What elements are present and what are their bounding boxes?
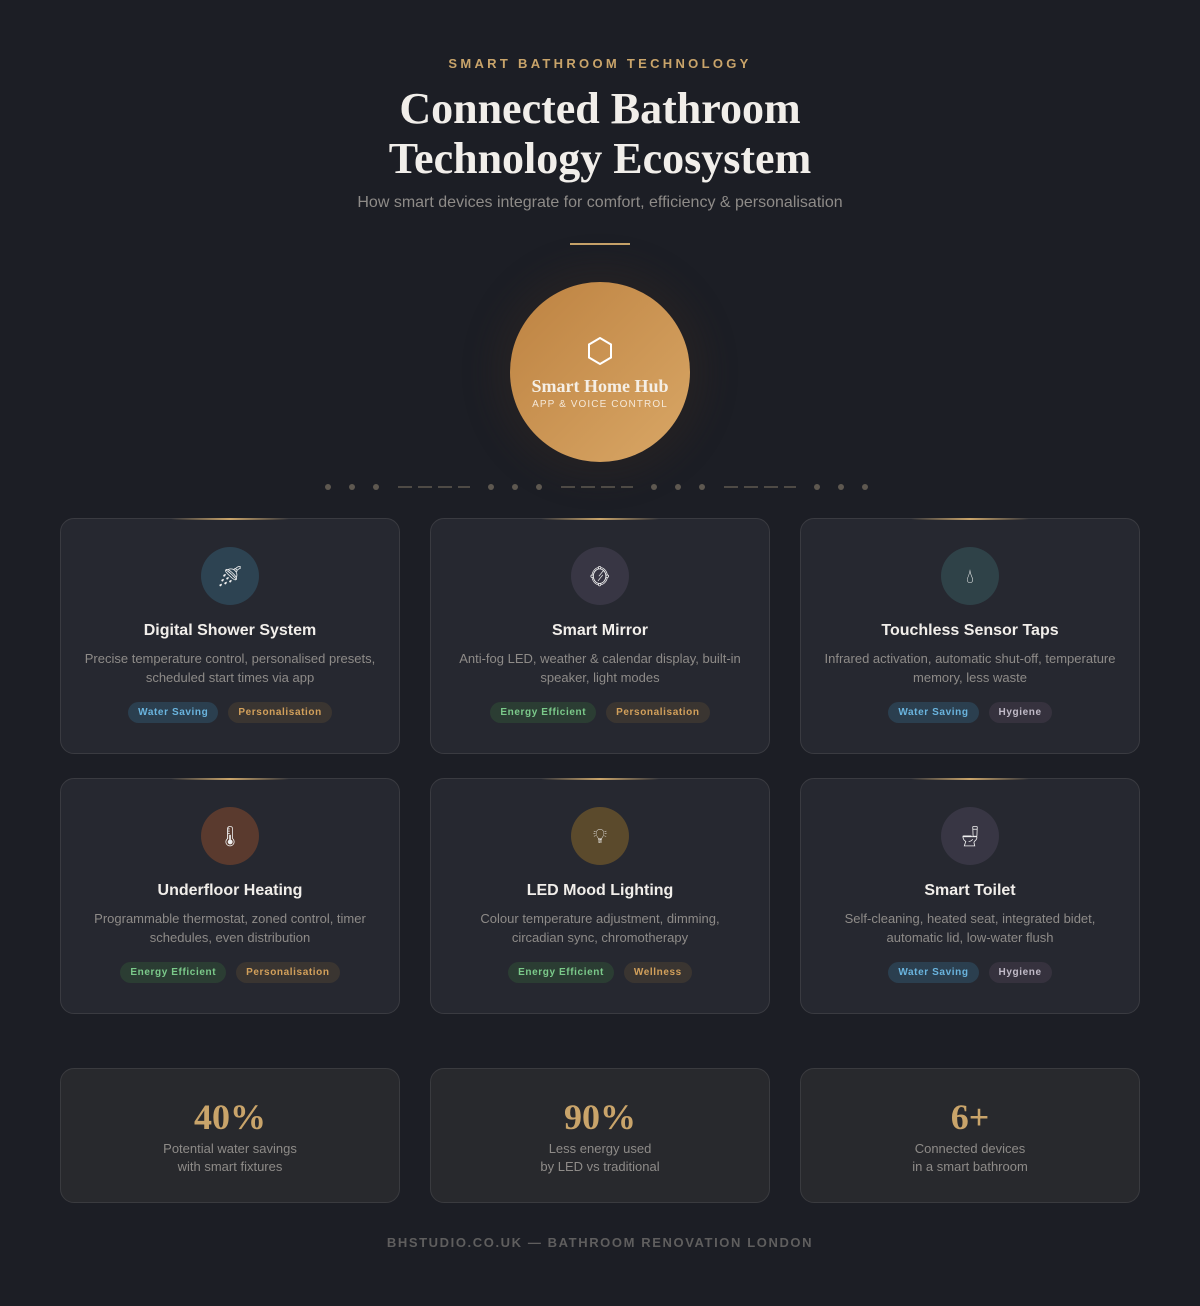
card: mirror: [430, 518, 770, 754]
title: [389, 84, 811, 183]
card: lighting: LED Mood Lighting: [527, 882, 673, 899]
card: shower: 🚿︎: [217, 564, 243, 588]
card: lighting: Wellness: [634, 967, 682, 978]
card: heating: Energy Efficient: [130, 967, 216, 978]
footer: BHSTUDIO.CO.UK — BATHROOM RENOVATION LONDON: [387, 1235, 813, 1250]
card: taps: 💧︎: [966, 564, 974, 588]
card: toilet: [800, 778, 1140, 1014]
card: shower: Water Saving: [138, 707, 208, 718]
card: mirror: Anti-fog LED, weather & calendar display, built-in speaker, light modes: [459, 651, 741, 685]
title: Connected Bathroom: [399, 84, 801, 133]
hub: [510, 282, 690, 462]
stat: water: Potential water savings: [163, 1141, 297, 1156]
stat: energy: 90%: [564, 1097, 636, 1137]
stat: energy: by LED vs traditional: [540, 1159, 660, 1174]
title: Technology Ecosystem: [389, 134, 811, 183]
card: heating: Personalisation: [246, 967, 330, 978]
card: taps: Hygiene: [999, 707, 1042, 718]
card: toilet: Smart Toilet: [924, 882, 1016, 899]
card: taps: Water Saving: [898, 707, 969, 718]
stat: devices: 6+: [951, 1097, 989, 1137]
card: shower: Digital Shower System: [144, 622, 316, 639]
stat: energy: Less energy used: [549, 1141, 651, 1156]
card: lighting: [430, 778, 770, 1014]
card: shower: [60, 518, 400, 754]
card: heating: Underfloor Heating: [158, 882, 302, 899]
card: taps: Infrared activation, automatic shut-off, temperature memory, less waste: [825, 651, 1115, 685]
icon: hexagon: [588, 337, 612, 365]
stat: devices: [800, 1068, 1140, 1203]
connector: [325, 484, 868, 490]
card: toilet: Water Saving: [898, 967, 969, 978]
eyebrow: SMART BATHROOM TECHNOLOGY: [448, 56, 752, 71]
card: toilet: Self-cleaning, heated seat, integrated bidet, automatic lid, low-water flush: [845, 911, 1095, 945]
card: lighting: Colour temperature adjustment, dimming, circadian sync, chromotherapy: [480, 911, 720, 945]
hub: APP & VOICE CONTROL: [532, 399, 668, 410]
card: toilet: Hygiene: [999, 967, 1042, 978]
card: mirror: 🪞︎: [587, 564, 613, 588]
stat: devices: in a smart bathroom: [912, 1159, 1028, 1174]
card: taps: Touchless Sensor Taps: [881, 622, 1059, 639]
card: toilet: 🚽︎: [957, 824, 983, 848]
card: heating: 🌡︎: [217, 824, 243, 848]
card: lighting: 💡︎: [593, 824, 607, 848]
stat: energy: [430, 1068, 770, 1203]
stat: water: [60, 1068, 400, 1203]
card: mirror: Smart Mirror: [552, 622, 648, 639]
card: heating: [60, 778, 400, 1014]
card: mirror: Personalisation: [616, 707, 700, 718]
card: shower: Precise temperature control, personalised presets, scheduled start times via app: [85, 651, 375, 685]
subtitle: How smart devices integrate for comfort, efficiency & personalisation: [357, 194, 843, 211]
stat: water: with smart fixtures: [178, 1159, 282, 1174]
card: taps: [800, 518, 1140, 754]
card: mirror: Energy Efficient: [500, 707, 586, 718]
stat: water: 40%: [194, 1097, 266, 1137]
card: heating: Programmable thermostat, zoned control, timer schedules, even distribution: [94, 911, 366, 945]
stat: devices: Connected devices: [915, 1141, 1025, 1156]
hub: Smart Home Hub: [532, 376, 668, 396]
card: lighting: Energy Efficient: [518, 967, 604, 978]
card: shower: Personalisation: [238, 707, 322, 718]
